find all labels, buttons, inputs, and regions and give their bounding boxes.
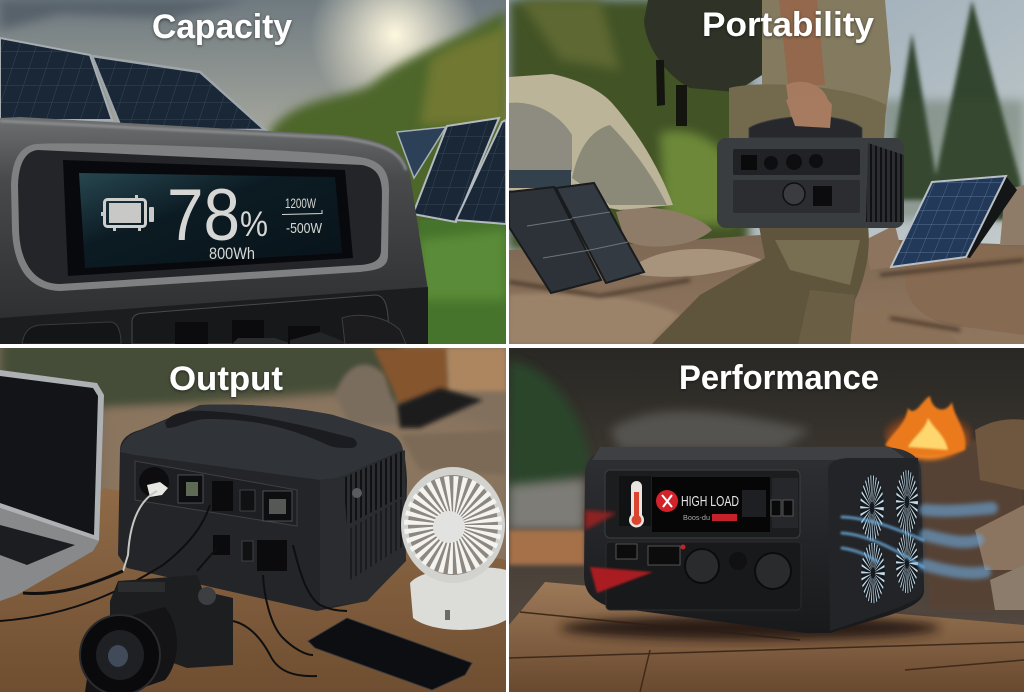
battery readout: 800Wh — [209, 244, 255, 263]
hiker with backpack — [644, 0, 891, 344]
output ports — [139, 467, 292, 571]
heading: portability: Portability — [702, 6, 874, 44]
laptop — [0, 370, 104, 601]
panel: output — [0, 340, 506, 692]
wooden table — [0, 488, 506, 692]
battery icon — [101, 195, 154, 231]
wooden stump — [509, 582, 1024, 692]
thermometer icon — [629, 481, 644, 528]
ports strip — [0, 287, 428, 344]
camera — [80, 575, 233, 692]
cables — [0, 491, 347, 676]
tent — [509, 74, 673, 210]
desk fan — [401, 467, 506, 630]
right solar panels — [397, 118, 506, 224]
power station — [584, 447, 924, 633]
high load warning: HIGH LOAD — [681, 493, 739, 510]
heading: capacity: Capacity — [152, 8, 292, 46]
handheld power station — [717, 95, 904, 228]
battery readout: 1200W — [285, 195, 317, 211]
fire — [884, 396, 972, 460]
blue airflow haze — [925, 508, 992, 573]
panel: portability — [509, 0, 1024, 344]
battery readout: % — [240, 205, 268, 244]
battery readout — [170, 188, 322, 259]
power station body — [0, 117, 428, 318]
cooling fans — [860, 470, 918, 603]
power station — [118, 405, 407, 611]
smartphone — [308, 618, 472, 690]
heading: output: Output — [169, 360, 283, 398]
right solar panel — [891, 176, 1017, 267]
panel: performance — [509, 348, 1024, 692]
battery readout: -500W — [286, 220, 323, 237]
high load warning — [656, 490, 739, 522]
capacity background: sky, trees and grass — [0, 0, 506, 344]
battery readout: 78 — [167, 175, 240, 256]
back solar panels — [0, 38, 265, 130]
carry handle — [165, 411, 357, 448]
high load warning: Boos-du — [683, 515, 710, 522]
output background: trees and rocks — [0, 348, 506, 560]
rocky ground — [509, 185, 1024, 344]
portability background: forest, sky and pines — [509, 0, 1024, 250]
panel: capacity — [0, 0, 506, 344]
performance background: dark forest and rocks — [509, 348, 1024, 625]
folding solar panel — [509, 183, 644, 293]
heading: performance: Performance — [679, 359, 879, 397]
blue airflow lines — [842, 517, 923, 567]
